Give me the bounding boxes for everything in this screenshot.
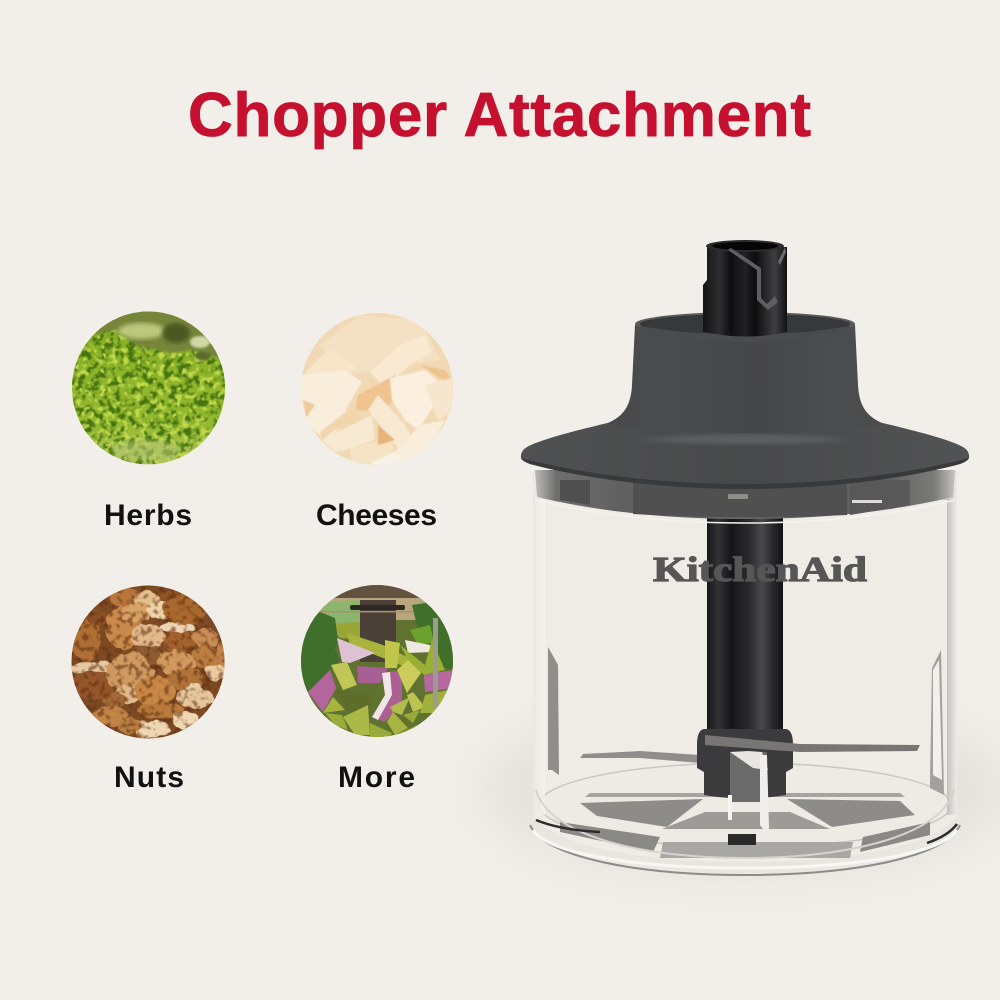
panel: more bbox=[298, 584, 456, 794]
blade right bbox=[705, 735, 920, 752]
KitchenAid logo: KitchenAid bbox=[653, 550, 868, 589]
icon: shaved cheese bbox=[300, 312, 456, 472]
jar floor bbox=[539, 763, 951, 858]
shaft bbox=[707, 515, 783, 740]
soft shadow bbox=[480, 705, 1000, 875]
lid collar band bbox=[535, 470, 955, 523]
panel: cheeses bbox=[300, 312, 456, 532]
jar base rings bbox=[530, 790, 960, 875]
drive shaft top bbox=[703, 240, 787, 336]
panel: herbs bbox=[70, 305, 230, 532]
icon: walnut pieces bbox=[68, 584, 228, 740]
label: cheeses: Cheeses bbox=[316, 499, 437, 532]
jar walls bbox=[533, 470, 957, 815]
product: chopper attachment bbox=[480, 240, 1000, 875]
inner rib right bbox=[930, 650, 944, 795]
panel: nuts bbox=[68, 584, 228, 794]
blade hub bbox=[697, 729, 793, 833]
inner rib left bbox=[548, 647, 559, 775]
icon: chopped herbs bbox=[72, 312, 225, 464]
label: more: More bbox=[338, 761, 415, 794]
blade left bbox=[580, 751, 700, 763]
label: herbs: Herbs bbox=[104, 499, 192, 532]
icon: chopped vegetables bbox=[298, 584, 456, 745]
title: Chopper Attachment bbox=[188, 81, 811, 150]
lid bbox=[521, 418, 969, 489]
jar body bbox=[533, 470, 957, 862]
lid neck bbox=[608, 312, 882, 444]
label: nuts: Nuts bbox=[114, 761, 184, 794]
